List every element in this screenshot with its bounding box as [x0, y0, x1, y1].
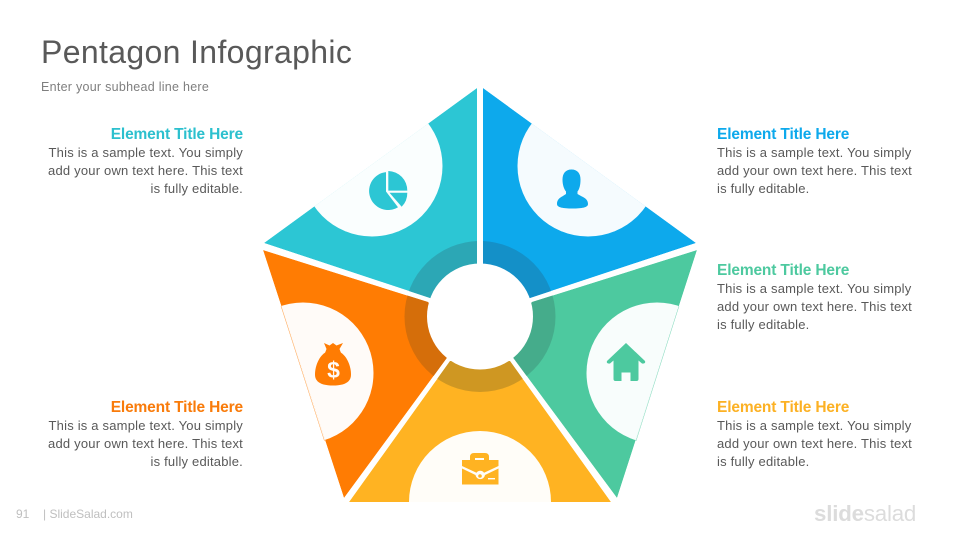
text block: blue — [717, 126, 912, 196]
body: blue: add your own text here. This text — [717, 163, 912, 178]
body: green: add your own text here. This text — [717, 299, 912, 314]
page number: 91 — [16, 507, 29, 521]
icon: money bag: $ — [327, 357, 340, 383]
body: yellow: add your own text here. This text — [717, 436, 912, 451]
segment: blue — [483, 88, 696, 298]
segment: green — [513, 250, 697, 498]
body: yellow — [717, 418, 912, 469]
segment: orange — [263, 250, 447, 498]
body: yellow: is fully editable. — [717, 454, 809, 469]
heading: yellow: Element Title Here — [717, 398, 849, 416]
segment: yellow — [349, 361, 611, 502]
icon: pie chart — [369, 171, 407, 210]
body: teal: is fully editable. — [151, 181, 243, 196]
body: blue — [717, 145, 912, 196]
body: teal: add your own text here. This text — [48, 163, 243, 178]
body: orange: is fully editable. — [151, 454, 243, 469]
text block: orange — [48, 398, 243, 469]
icon: money bag — [315, 343, 351, 386]
heading: teal: Element Title Here — [111, 126, 243, 142]
text block: green — [717, 262, 912, 332]
body: green: is fully editable. — [717, 317, 809, 332]
body: yellow: This is a sample text. You simply — [717, 418, 911, 433]
icon: briefcase — [462, 453, 498, 484]
body: teal: This is a sample text. You simply — [49, 145, 243, 160]
body: blue: This is a sample text. You simply — [717, 145, 911, 160]
text block: yellow — [717, 398, 912, 469]
title: Pentagon Infographic — [41, 34, 352, 70]
body: green — [717, 281, 912, 332]
heading: orange: Element Title Here — [111, 398, 243, 416]
body: orange — [48, 418, 243, 469]
heading: green: Element Title Here — [717, 262, 849, 278]
segment: teal — [264, 88, 477, 298]
icon: house — [607, 343, 645, 381]
text block: teal — [48, 126, 243, 196]
heading: blue: Element Title Here — [717, 126, 849, 142]
logo: slidesalad — [814, 501, 916, 526]
icon: person — [557, 170, 588, 208]
body: teal — [48, 145, 243, 196]
body: green: This is a sample text. You simply — [717, 281, 911, 296]
pentagon diagram — [263, 88, 697, 502]
body: orange: add your own text here. This text — [48, 436, 243, 451]
body: orange: This is a sample text. You simply — [49, 418, 243, 433]
body: blue: is fully editable. — [717, 181, 809, 196]
center hole — [427, 264, 533, 370]
subhead: Enter your subhead line here — [41, 80, 209, 94]
footer brand: | SlideSalad.com — [43, 507, 133, 521]
